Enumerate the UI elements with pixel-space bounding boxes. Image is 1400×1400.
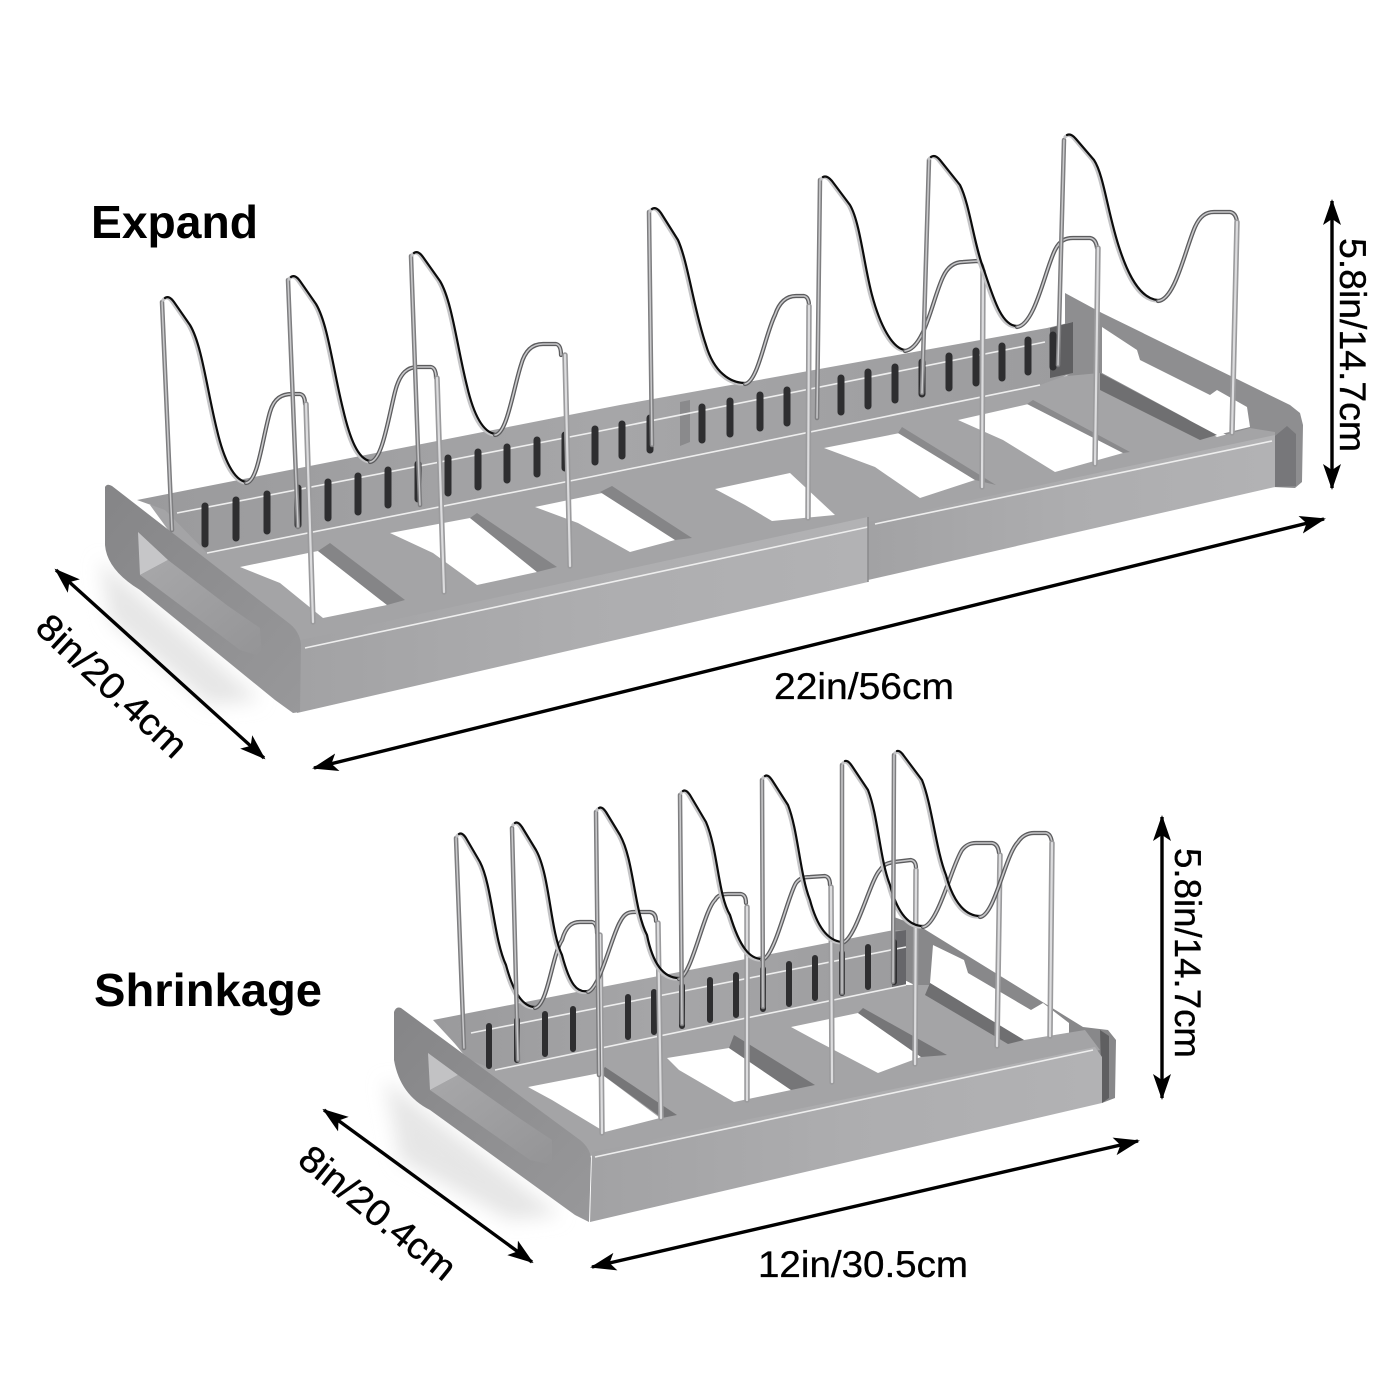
rack floor with openings <box>440 983 1100 1156</box>
back wall with slots <box>433 930 906 1070</box>
shadow under shrunk rack handle <box>385 1080 560 1220</box>
rear end plate <box>1065 293 1303 488</box>
label: expanded depth: 8in/20.4cm <box>28 606 196 766</box>
arrow: shrunk depth <box>324 1110 532 1262</box>
left end plate with handle <box>105 485 301 713</box>
wire divider 4 <box>649 208 809 518</box>
wire divider 2 <box>288 276 444 592</box>
wire divider 1 <box>162 297 313 622</box>
label: shrunk depth: 8in/20.4cm <box>291 1137 464 1289</box>
wire divider 6 <box>922 156 1098 464</box>
expanded rack <box>100 134 1303 713</box>
wire divider 2 <box>512 822 661 1118</box>
arrow: shrunk length <box>592 1141 1138 1267</box>
wire divider 3 <box>411 252 570 566</box>
label: expanded height: 5.8in/14.7cm <box>1332 238 1373 452</box>
wire divider 3 <box>596 808 747 1100</box>
front rail <box>297 435 1275 713</box>
wire divider 4 <box>680 790 832 1082</box>
wire divider 1 <box>456 834 602 1133</box>
arrow: expanded height <box>1330 201 1334 488</box>
rack floor with openings <box>150 373 1275 645</box>
label: shrunk length: 12in/30.5cm <box>758 1244 968 1285</box>
shadow under expanded rack handle <box>100 560 260 705</box>
left end plate with handle <box>394 1008 591 1222</box>
arrow: shrunk height <box>1160 817 1164 1098</box>
wire divider 5 <box>817 176 983 487</box>
shrunk rack <box>385 751 1116 1222</box>
label: expanded length: 22in/56cm <box>774 666 954 707</box>
label: shrunk height: 5.8in/14.7cm <box>1167 848 1208 1058</box>
title: Expand: Expand <box>91 196 258 248</box>
arrow: expanded length <box>314 519 1324 768</box>
wire divider 5 <box>762 776 916 1064</box>
arrow: expanded depth <box>56 570 264 758</box>
wire divider 7 <box>893 751 1052 1036</box>
front rail <box>590 1047 1102 1222</box>
wire divider 6 <box>842 761 1000 1046</box>
title: Shrinkage: Shrinkage <box>94 964 322 1016</box>
back wall with slots <box>137 322 1073 553</box>
rear end plate <box>894 917 1116 1103</box>
wire divider 7 <box>1058 134 1237 433</box>
